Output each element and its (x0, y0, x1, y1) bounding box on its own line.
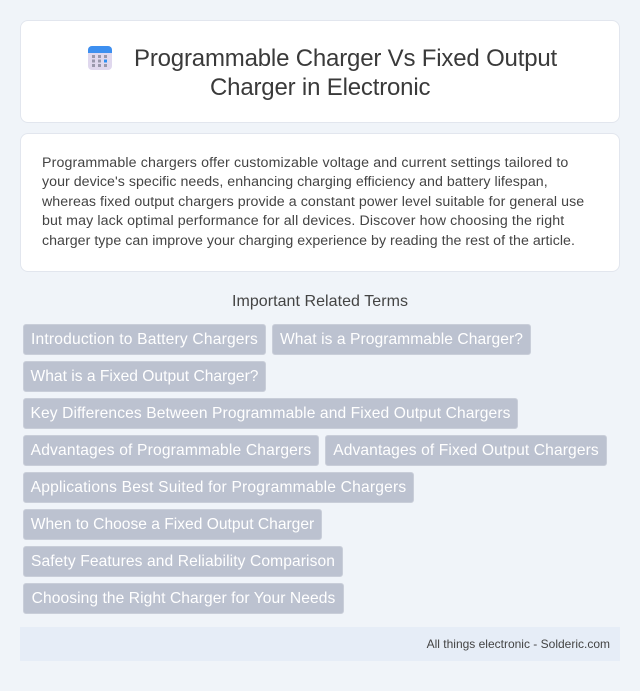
tag (23, 472, 414, 503)
tag: Advantages of Programmable Chargers (31, 442, 311, 459)
description line 5: charger type can improve your charging experience by reading the rest of the article. (42, 233, 575, 249)
title line 1: Programmable Charger Vs Fixed Output (134, 45, 557, 72)
tag (23, 583, 344, 614)
tag: What is a Programmable Charger? (280, 331, 523, 348)
heading: important related terms: Important Related Terms (232, 293, 408, 310)
panel: description (20, 133, 620, 272)
title line 2: Charger in Electronic (210, 74, 430, 101)
tag (23, 435, 319, 466)
tag: Applications Best Suited for Programmable Chargers (31, 479, 406, 496)
tag: Choosing the Right Charger for Your Needs (32, 590, 335, 607)
description line 2: your device's specific needs, enhancing charging efficiency and battery lifespan, (42, 174, 548, 190)
tag (23, 398, 518, 429)
tag: What is a Fixed Output Charger? (31, 368, 258, 385)
tag (23, 361, 266, 392)
tag: Introduction to Battery Chargers (31, 331, 258, 348)
tag (272, 324, 531, 355)
tag (23, 509, 322, 540)
footer credit: All things electronic - Solderic.com (427, 637, 610, 651)
tag: Advantages of Fixed Output Chargers (333, 442, 599, 459)
tag: Safety Features and Reliability Comparison (31, 553, 335, 570)
tag: When to Choose a Fixed Output Charger (31, 516, 314, 533)
tag: Key Differences Between Programmable and Fixed Output Chargers (30, 405, 511, 422)
title card (20, 20, 620, 123)
description line 1: Programmable chargers offer customizable voltage and current settings tailored to (42, 155, 568, 171)
tag (23, 324, 266, 355)
icon: calendar grid (88, 46, 112, 70)
tag (23, 546, 343, 577)
footer bar (20, 627, 620, 661)
description line 4: but may lack optimal performance for all devices. Discover how choosing the right (42, 213, 564, 229)
description line 3: whereas fixed output chargers provide a constant power level suitable for general use (42, 194, 584, 210)
tag (325, 435, 607, 466)
